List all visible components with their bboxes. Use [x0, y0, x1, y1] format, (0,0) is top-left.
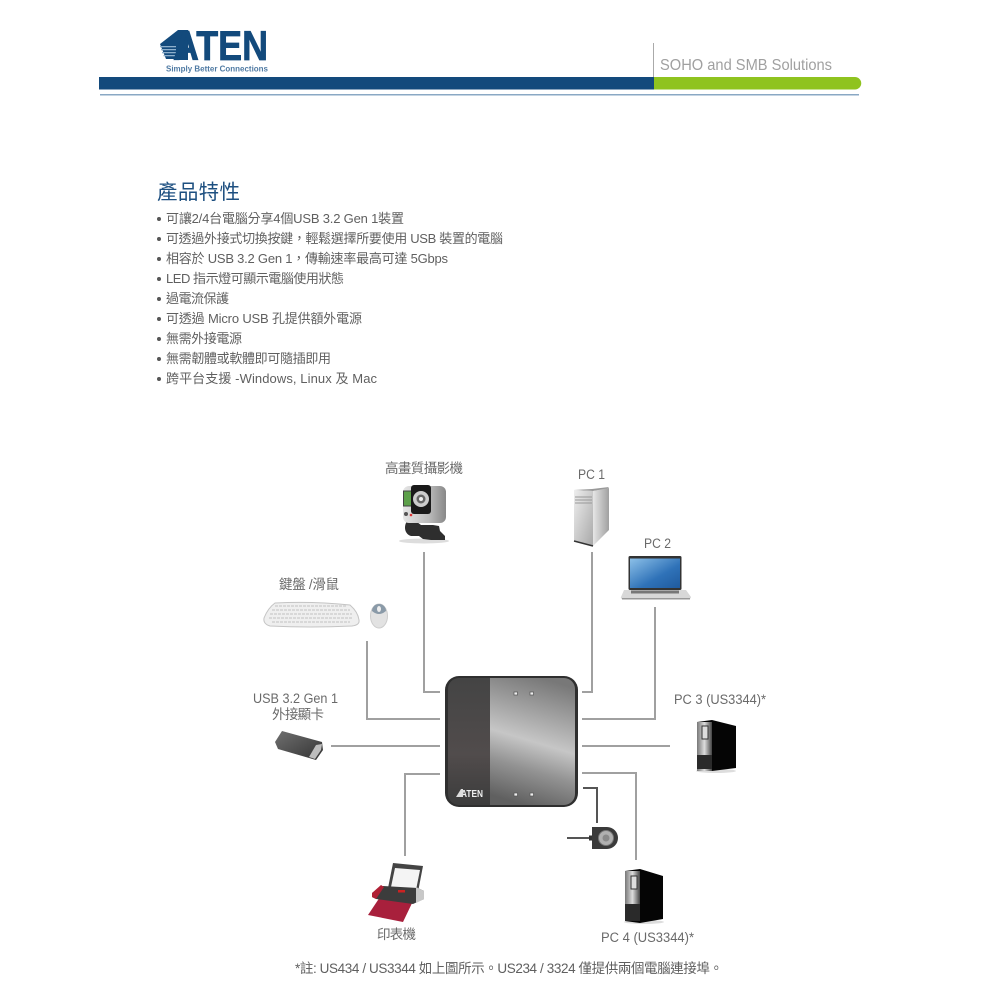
label: PC 4: PC 4 (US3344)* [601, 930, 695, 945]
remote port selector [567, 788, 618, 849]
icon: camera [399, 485, 449, 544]
icon: mouse [370, 604, 388, 628]
label: USB display adapter: 外接顯卡 [272, 706, 324, 722]
icon: PC 3 tower [696, 720, 736, 773]
device: USB peripheral switch: ATEN [461, 789, 483, 800]
device: USB peripheral switch [445, 676, 578, 807]
header: ATEN logo: ATEN [173, 22, 268, 69]
label: keyboard and mouse: 鍵盤 /滑鼠 [279, 577, 339, 592]
feature list: 可透過外接式切換按鍵，輕鬆選擇所要使用 USB 裝置的電腦 [166, 231, 503, 246]
label: USB display adapter: USB 3.2 Gen 1 [253, 691, 338, 706]
feature list: 無需外接電源 [166, 331, 242, 346]
icon: PC 4 tower [624, 869, 664, 924]
label: USB display adapter [253, 691, 338, 722]
icon: PC 1 tower [574, 487, 609, 546]
feature list: 可讓2/4台電腦分享4個USB 3.2 Gen 1裝置 [166, 211, 404, 226]
header: ATEN logo: Simply Better Connections [166, 64, 268, 74]
feature list: 過電流保護 [166, 291, 229, 306]
feature list: LED 指示燈可顯示電腦使用狀態 [166, 271, 344, 286]
heading: product features: 產品特性 [157, 181, 240, 204]
icon: printer [368, 863, 424, 922]
label: PC 3: PC 3 (US3344)* [674, 692, 767, 707]
header: solution label: SOHO and SMB Solutions [660, 57, 832, 74]
header: blue and green bar [99, 43, 861, 96]
feature list: 無需韌體或軟體即可隨插即用 [166, 351, 331, 366]
feature list: 可透過 Micro USB 孔提供額外電源 [166, 311, 362, 326]
icon: display adapter [275, 731, 323, 760]
feature list: 相容於 USB 3.2 Gen 1，傳輸速率最高可達 5Gbps [166, 251, 448, 266]
label: PC 2: PC 2 [644, 536, 671, 551]
footnote: *註: US434 / US3344 如上圖所示。US234 / 3324 僅提供兩個電腦連接埠。 [295, 960, 723, 976]
icon: keyboard [264, 602, 359, 627]
feature list: 跨平台支援 -Windows, Linux 及 Mac [166, 371, 378, 386]
label: PC 1: PC 1 [578, 467, 605, 482]
icon: PC 2 laptop [621, 556, 691, 600]
label: printer: 印表機 [377, 927, 416, 942]
connection lines [331, 552, 670, 860]
feature list [157, 211, 503, 386]
label: camera: 高畫質攝影機 [385, 460, 464, 476]
